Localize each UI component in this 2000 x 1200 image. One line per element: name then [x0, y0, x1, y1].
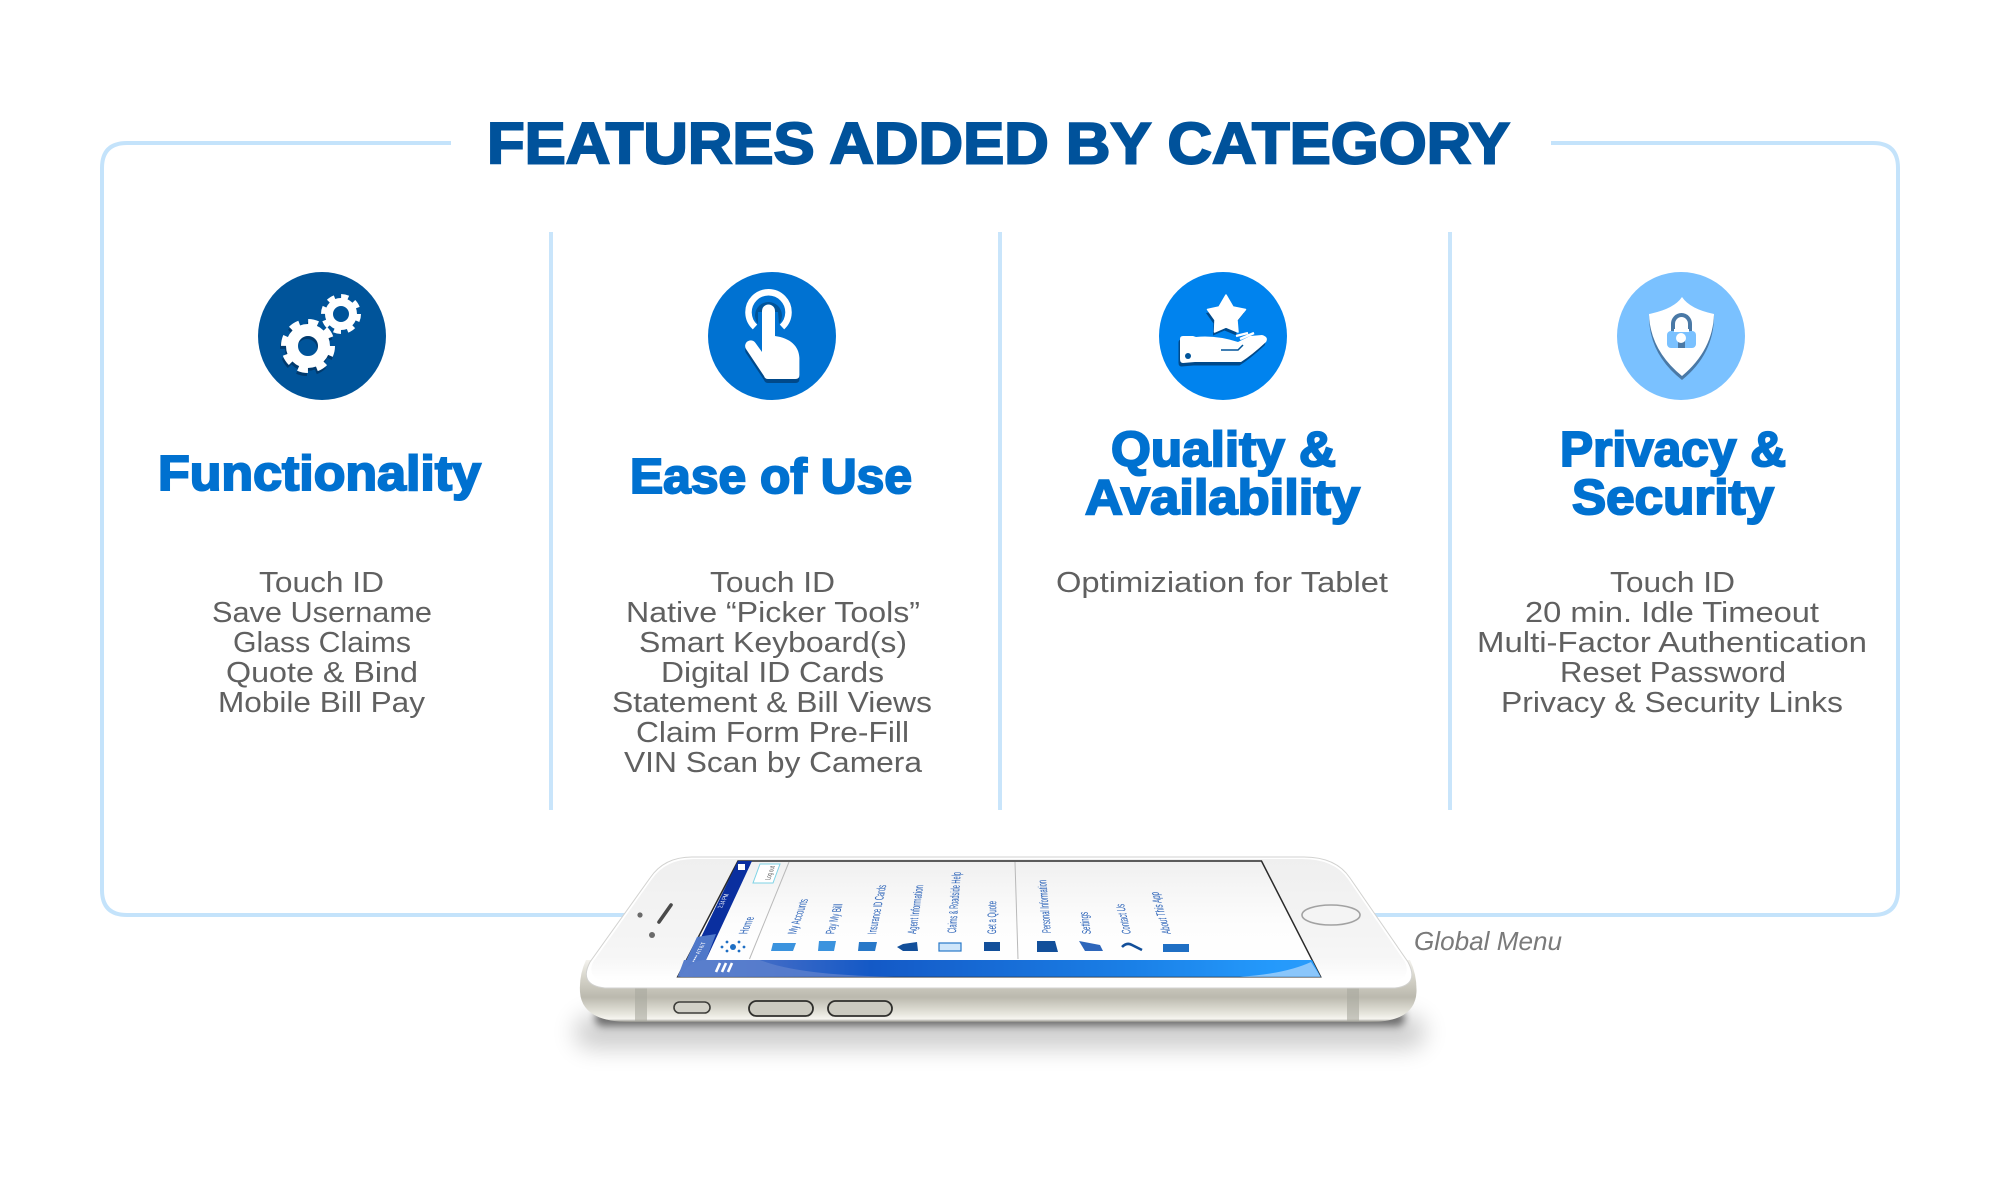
list: functionality features: Save Username [212, 597, 432, 629]
title: FEATURES ADDED BY CATEGORY [487, 112, 1510, 176]
list: functionality features: Glass Claims [233, 627, 411, 659]
phone face [586, 857, 1412, 988]
panel: functionality [158, 272, 481, 719]
phone shadow [575, 1010, 1425, 1048]
heading: privacy and security [1560, 423, 1786, 525]
volume buttons [749, 1001, 892, 1016]
list: quality features: Optimiziation for Tablet [1056, 567, 1388, 599]
phone screen: Claims & Roadside Help [945, 872, 964, 933]
heading: privacy and security: Privacy & [1560, 423, 1786, 477]
list: ease of use features: Touch ID [710, 567, 835, 599]
list: ease of use features: Digital ID Cards [661, 657, 884, 689]
menu labels: My Accounts [784, 899, 811, 934]
heading: privacy and security: Security [1572, 471, 1774, 525]
menu dividers [750, 862, 1018, 959]
menu labels: Personal Information [1035, 880, 1054, 933]
list: ease of use features: Native “Picker Tools” [626, 597, 920, 629]
list: ease of use features: VIN Scan by Camera [624, 747, 922, 779]
menu icons [721, 941, 1189, 952]
menu labels [736, 872, 1174, 934]
mute switch [674, 1002, 710, 1013]
caption: global menu: Global Menu [1414, 926, 1562, 956]
list: privacy features: Privacy & Security Links [1501, 687, 1843, 719]
menu labels: Insurance ID Cards [865, 885, 889, 934]
list: privacy features [1477, 567, 1867, 719]
icon: gears [258, 272, 386, 400]
list: privacy features: Reset Password [1560, 657, 1786, 689]
list: functionality features: Touch ID [259, 567, 384, 599]
icon: shield with lock [1617, 272, 1745, 400]
heading: ease of use: Ease of Use [630, 450, 912, 504]
list: functionality features: Mobile Bill Pay [218, 687, 426, 719]
status bar: 2:34 PM [715, 894, 731, 908]
phone screen [678, 861, 1321, 977]
menu labels: Home [736, 917, 757, 934]
icon: touch finger [708, 272, 836, 400]
icon: hand with star [1159, 272, 1287, 400]
column divider 2 [998, 232, 1002, 810]
list: ease of use features [612, 567, 932, 779]
list: ease of use features: Claim Form Pre-Fill [636, 717, 909, 749]
log out button: Log out [763, 866, 777, 880]
speaker [659, 905, 671, 922]
heading: functionality: Functionality [158, 447, 481, 501]
menu labels: Get a Quote [985, 901, 999, 934]
status bar [690, 864, 745, 962]
panel: privacy and security [1477, 272, 1867, 719]
hamburger menu [716, 963, 732, 972]
list: privacy features: 20 min. Idle Timeout [1525, 597, 1819, 629]
menu labels: Contact Us [1113, 904, 1134, 934]
column divider 1 [549, 232, 553, 810]
list: privacy features: Multi-Factor Authentication [1477, 627, 1867, 659]
menu labels: Settings [1077, 912, 1094, 934]
panel: ease of use [612, 272, 932, 779]
log out button [753, 864, 780, 883]
menu labels: Agent Information [905, 885, 926, 934]
list: functionality features [212, 567, 432, 719]
heading: quality and availability: Availability [1085, 471, 1360, 525]
list: privacy features: Touch ID [1610, 567, 1735, 599]
camera dots [637, 912, 655, 938]
app header strip [679, 861, 752, 976]
bottom blue bar [678, 960, 1321, 977]
panel frame [102, 143, 1898, 915]
list: functionality features: Quote & Bind [226, 657, 418, 689]
phone metal side [580, 960, 1417, 1022]
heading: quality and availability [1085, 423, 1360, 525]
list: ease of use features: Statement & Bill Views [612, 687, 932, 719]
heading: quality and availability: Quality & [1111, 423, 1336, 477]
panel: quality and availability [1056, 272, 1388, 599]
column divider 3 [1448, 232, 1452, 810]
menu labels: Pay My Bill [822, 904, 846, 934]
phone illustration [575, 857, 1425, 1048]
status bar: •••• AT&T [690, 942, 708, 962]
home button [1302, 905, 1360, 925]
menu labels: About This App [1147, 892, 1174, 934]
list: ease of use features: Smart Keyboard(s) [639, 627, 907, 659]
